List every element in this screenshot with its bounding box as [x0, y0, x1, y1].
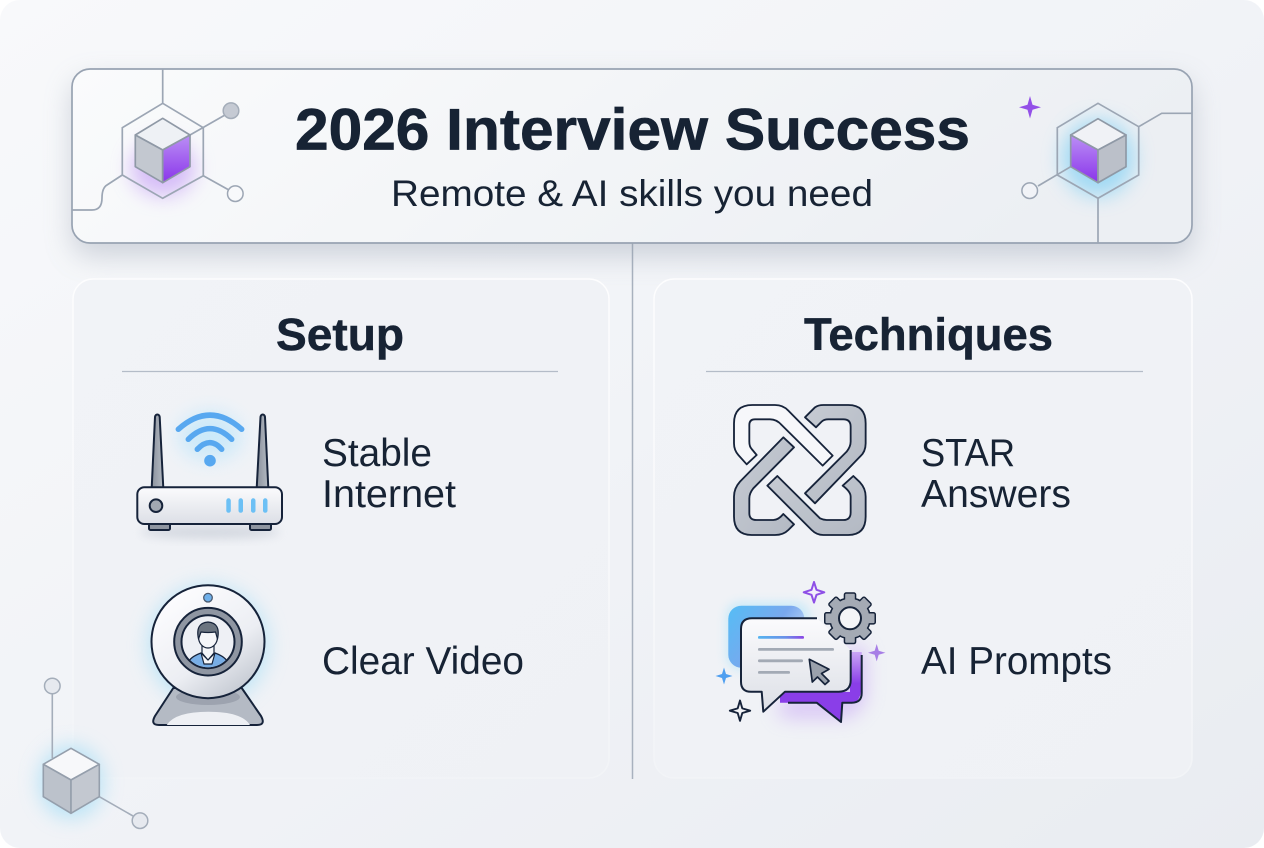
heading: techniques: Techniques [804, 309, 1053, 360]
icon: wifi router [137, 412, 282, 539]
icon: right hexagon cube [1022, 103, 1192, 243]
icon: left hexagon cube [72, 69, 243, 210]
icon: purple sparkle [1019, 96, 1041, 118]
label: ai prompts: AI Prompts [921, 640, 1112, 683]
title: 2026 Interview Success [295, 98, 970, 162]
panel: setup [81, 278, 610, 726]
label: stable internet: Internet [322, 473, 456, 516]
label: star answers: Answers [921, 473, 1071, 516]
divider: vertical centre line [632, 243, 634, 779]
label: stable internet: Stable [322, 432, 432, 475]
subtitle: Remote & AI skills you need [391, 173, 873, 214]
icon: blue sparkle [716, 668, 732, 684]
icon: webcam [148, 585, 268, 725]
panel: techniques [654, 279, 1192, 778]
icon: cursor [809, 659, 829, 684]
label: star answers: STAR [921, 432, 1015, 475]
icon: lilac sparkle [868, 644, 885, 661]
icon: bottom-left cube with nodes [39, 678, 148, 828]
icon: gear [826, 594, 874, 643]
icon: outlined purple sparkle [804, 582, 824, 603]
icon: AI prompt chat bubbles [716, 582, 885, 722]
icon: interlocking knot [734, 405, 866, 535]
icon: dark sparkle [730, 700, 750, 721]
label: clear video: Clear Video [322, 640, 524, 683]
panel: header [72, 69, 1192, 256]
heading: setup: Setup [276, 309, 404, 360]
